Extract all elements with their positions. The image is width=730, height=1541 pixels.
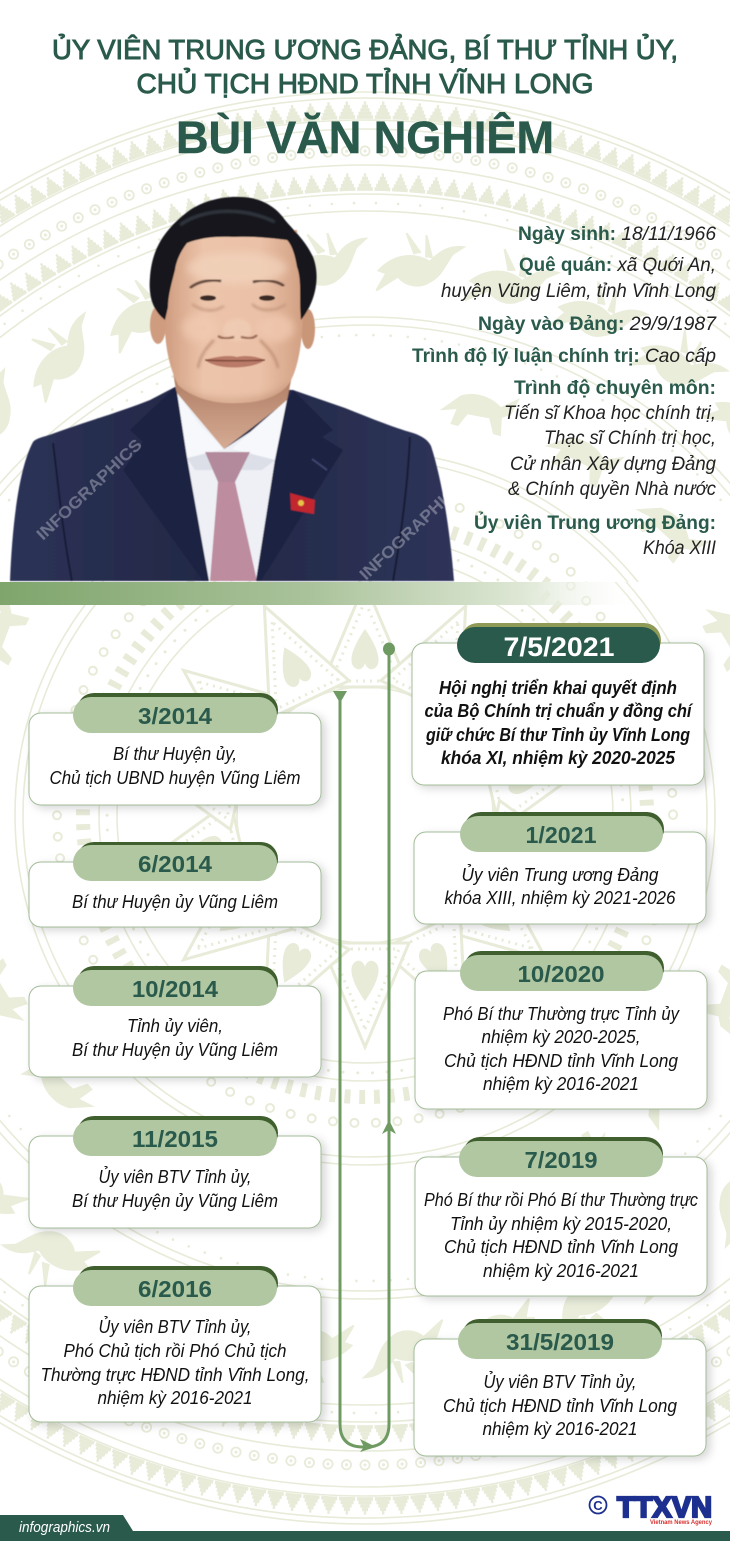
description: Ủy viên BTV Tỉnh ủy, xyxy=(98,1166,252,1187)
personal information block: Ngày sinh: 18/11/1966 xyxy=(518,224,716,245)
card: 10/2020 xyxy=(415,951,707,1109)
date pill xyxy=(73,842,278,881)
description: Ủy viên BTV Tỉnh ủy, xyxy=(98,1316,252,1337)
suit xyxy=(10,387,454,581)
timeline arrow line xyxy=(333,642,396,1452)
portrait photo xyxy=(10,197,469,584)
mouth xyxy=(205,356,265,368)
title: CHỦ TỊCH HĐND TỈNH VĨNH LONG xyxy=(136,67,594,99)
shirt xyxy=(177,393,287,581)
watermark text on photo: INFOGRAPHICS xyxy=(33,435,146,544)
footer site label: infographics.vn xyxy=(19,1519,110,1536)
title xyxy=(52,33,678,163)
title: BÙI VĂN NGHIÊM xyxy=(176,112,554,163)
description xyxy=(443,1003,681,1094)
card: 6/2016 xyxy=(29,1266,321,1422)
card box xyxy=(414,1339,706,1456)
description: khóa XI, nhiệm kỳ 2020-2025 xyxy=(441,747,676,768)
description: Chủ tịch HĐND tỉnh Vĩnh Long xyxy=(444,1236,679,1257)
card box xyxy=(29,986,321,1077)
description xyxy=(40,1316,310,1408)
personal information block: Khóa XIII xyxy=(643,538,717,559)
green divider band xyxy=(0,582,730,605)
card box xyxy=(415,971,707,1109)
watermark text on photo xyxy=(33,435,469,584)
description: nhiệm kỳ 2016-2021 xyxy=(98,1387,252,1408)
description xyxy=(50,743,300,788)
description xyxy=(443,1371,678,1439)
description: Bí thư Huyện ủy Vũng Liêm xyxy=(72,1039,278,1060)
description: Thường trực HĐND tỉnh Vĩnh Long, xyxy=(40,1364,310,1385)
neck xyxy=(172,365,294,449)
date pill xyxy=(459,1137,663,1177)
footer bar xyxy=(0,1515,730,1541)
card box xyxy=(412,643,704,785)
description: Ủy viên BTV Tỉnh ủy, xyxy=(484,1371,636,1392)
title: ỦY VIÊN TRUNG ƯƠNG ĐẢNG, BÍ THƯ TỈNH ỦY, xyxy=(52,33,678,65)
date pill: 6/2016 xyxy=(138,1276,212,1302)
date pill xyxy=(73,1116,278,1156)
description: giữ chức Bí thư Tỉnh ủy Vĩnh Long xyxy=(425,724,690,745)
date pill: 31/5/2019 xyxy=(506,1329,614,1355)
card box xyxy=(415,1157,707,1296)
description: Chủ tịch HĐND tỉnh Vĩnh Long xyxy=(444,1050,679,1071)
wordmark: TTXVN xyxy=(617,1492,712,1524)
date pill xyxy=(458,1319,662,1359)
copyright mark: C xyxy=(593,1498,603,1513)
description: Phó Bí thư Thường trực Tỉnh ủy xyxy=(443,1003,681,1024)
description: Tỉnh ủy nhiệm kỳ 2015-2020, xyxy=(450,1213,672,1234)
date pill: 1/2021 xyxy=(526,822,597,848)
date pill xyxy=(73,966,278,1006)
face xyxy=(165,230,303,403)
date pill: 11/2015 xyxy=(132,1126,218,1152)
card: 6/2014 xyxy=(29,842,321,927)
description: Ủy viên Trung ương Đảng xyxy=(462,864,659,885)
card: 31/5/2019 xyxy=(414,1319,706,1456)
description: của Bộ Chính trị chuẩn y đồng chí xyxy=(424,700,694,721)
personal information block: Quê quán: xã Quới An, xyxy=(519,255,716,276)
description: Bí thư Huyện ủy Vũng Liêm xyxy=(72,1190,278,1211)
background: upper bronze drum pattern xyxy=(0,91,730,582)
watermark text on photo: INFOGRAPHICS xyxy=(356,475,469,584)
date pill xyxy=(460,951,664,991)
personal information block xyxy=(412,224,717,559)
description: Bí thư Huyện ủy Vũng Liêm xyxy=(72,891,278,912)
card: 10/2014 xyxy=(29,966,321,1077)
background: lower bronze drum pattern xyxy=(0,582,730,1525)
card box xyxy=(29,1136,321,1228)
date pill xyxy=(457,623,661,663)
date pill xyxy=(460,812,664,852)
description: Tỉnh ủy viên, xyxy=(127,1015,223,1036)
date pill: 10/2020 xyxy=(518,961,604,987)
card box xyxy=(29,713,321,805)
description xyxy=(72,1166,278,1211)
description: Chủ tịch UBND huyện Vũng Liêm xyxy=(50,767,300,788)
arrow head: right side upward xyxy=(382,1120,396,1134)
date pill: 10/2014 xyxy=(132,976,218,1002)
personal information block: Trình độ chuyên môn: xyxy=(514,378,716,399)
date pill: 3/2014 xyxy=(138,703,212,729)
end dot xyxy=(383,642,395,656)
date pill: 7/2019 xyxy=(524,1147,598,1173)
personal information block: Tiến sĩ Khoa học chính trị, xyxy=(504,403,716,424)
personal information block: Thạc sĩ Chính trị học, xyxy=(544,428,716,449)
card: 7/5/2021 highlighted xyxy=(412,623,704,785)
description: Bí thư Huyện ủy, xyxy=(113,743,237,764)
card: 11/2015 xyxy=(29,1116,321,1228)
description: Chủ tịch HĐND tỉnh Vĩnh Long xyxy=(443,1395,678,1416)
card: 7/2019 xyxy=(415,1137,707,1296)
card: 1/2021 xyxy=(414,812,706,924)
hair xyxy=(150,197,317,320)
TTXVN logo xyxy=(590,1492,713,1526)
description xyxy=(444,864,676,908)
card box xyxy=(29,1286,321,1422)
card box xyxy=(29,862,321,927)
description: Hội nghị triển khai quyết định xyxy=(439,677,677,698)
card box xyxy=(414,832,706,924)
description: khóa XIII, nhiệm kỳ 2021-2026 xyxy=(444,887,676,908)
face shading xyxy=(178,252,294,405)
description: nhiệm kỳ 2020-2025, xyxy=(482,1026,640,1047)
agency line: Vietnam News Agency xyxy=(650,1519,713,1526)
arrow head: start triangle xyxy=(333,691,347,703)
description: Phó Bí thư rồi Phó Bí thư Thường trực xyxy=(424,1189,699,1210)
arrow head: bottom xyxy=(360,1439,376,1452)
personal information block: Ngày vào Đảng: 29/9/1987 xyxy=(478,314,717,335)
personal information block: Ủy viên Trung ương Đảng: xyxy=(474,512,716,534)
date pill: 7/5/2021 xyxy=(504,632,614,662)
description xyxy=(424,677,694,768)
personal information block: & Chính quyền Nhà nước xyxy=(508,479,716,500)
personal information block: Cử nhân Xây dựng Đảng xyxy=(510,454,716,475)
description: nhiệm kỳ 2016-2021 xyxy=(483,1073,639,1094)
date pill xyxy=(73,1266,278,1306)
card: 3/2014 xyxy=(29,693,321,805)
description xyxy=(424,1189,699,1281)
description: nhiệm kỳ 2016-2021 xyxy=(482,1418,638,1439)
description: Phó Chủ tịch rồi Phó Chủ tịch xyxy=(64,1340,286,1361)
description xyxy=(72,1015,278,1060)
personal information block: Trình độ lý luận chính trị: Cao cấp xyxy=(412,346,716,367)
date pill: 6/2014 xyxy=(138,851,212,877)
personal information block: huyện Vũng Liêm, tỉnh Vĩnh Long xyxy=(441,281,716,302)
date pill xyxy=(73,693,278,733)
tie xyxy=(205,452,250,482)
ears xyxy=(150,306,166,344)
description: nhiệm kỳ 2016-2021 xyxy=(483,1260,639,1281)
lapels xyxy=(123,387,209,581)
sleeve seams xyxy=(53,443,72,581)
nose xyxy=(223,319,251,341)
flag pin xyxy=(290,493,315,514)
brows and eyes xyxy=(190,280,221,288)
